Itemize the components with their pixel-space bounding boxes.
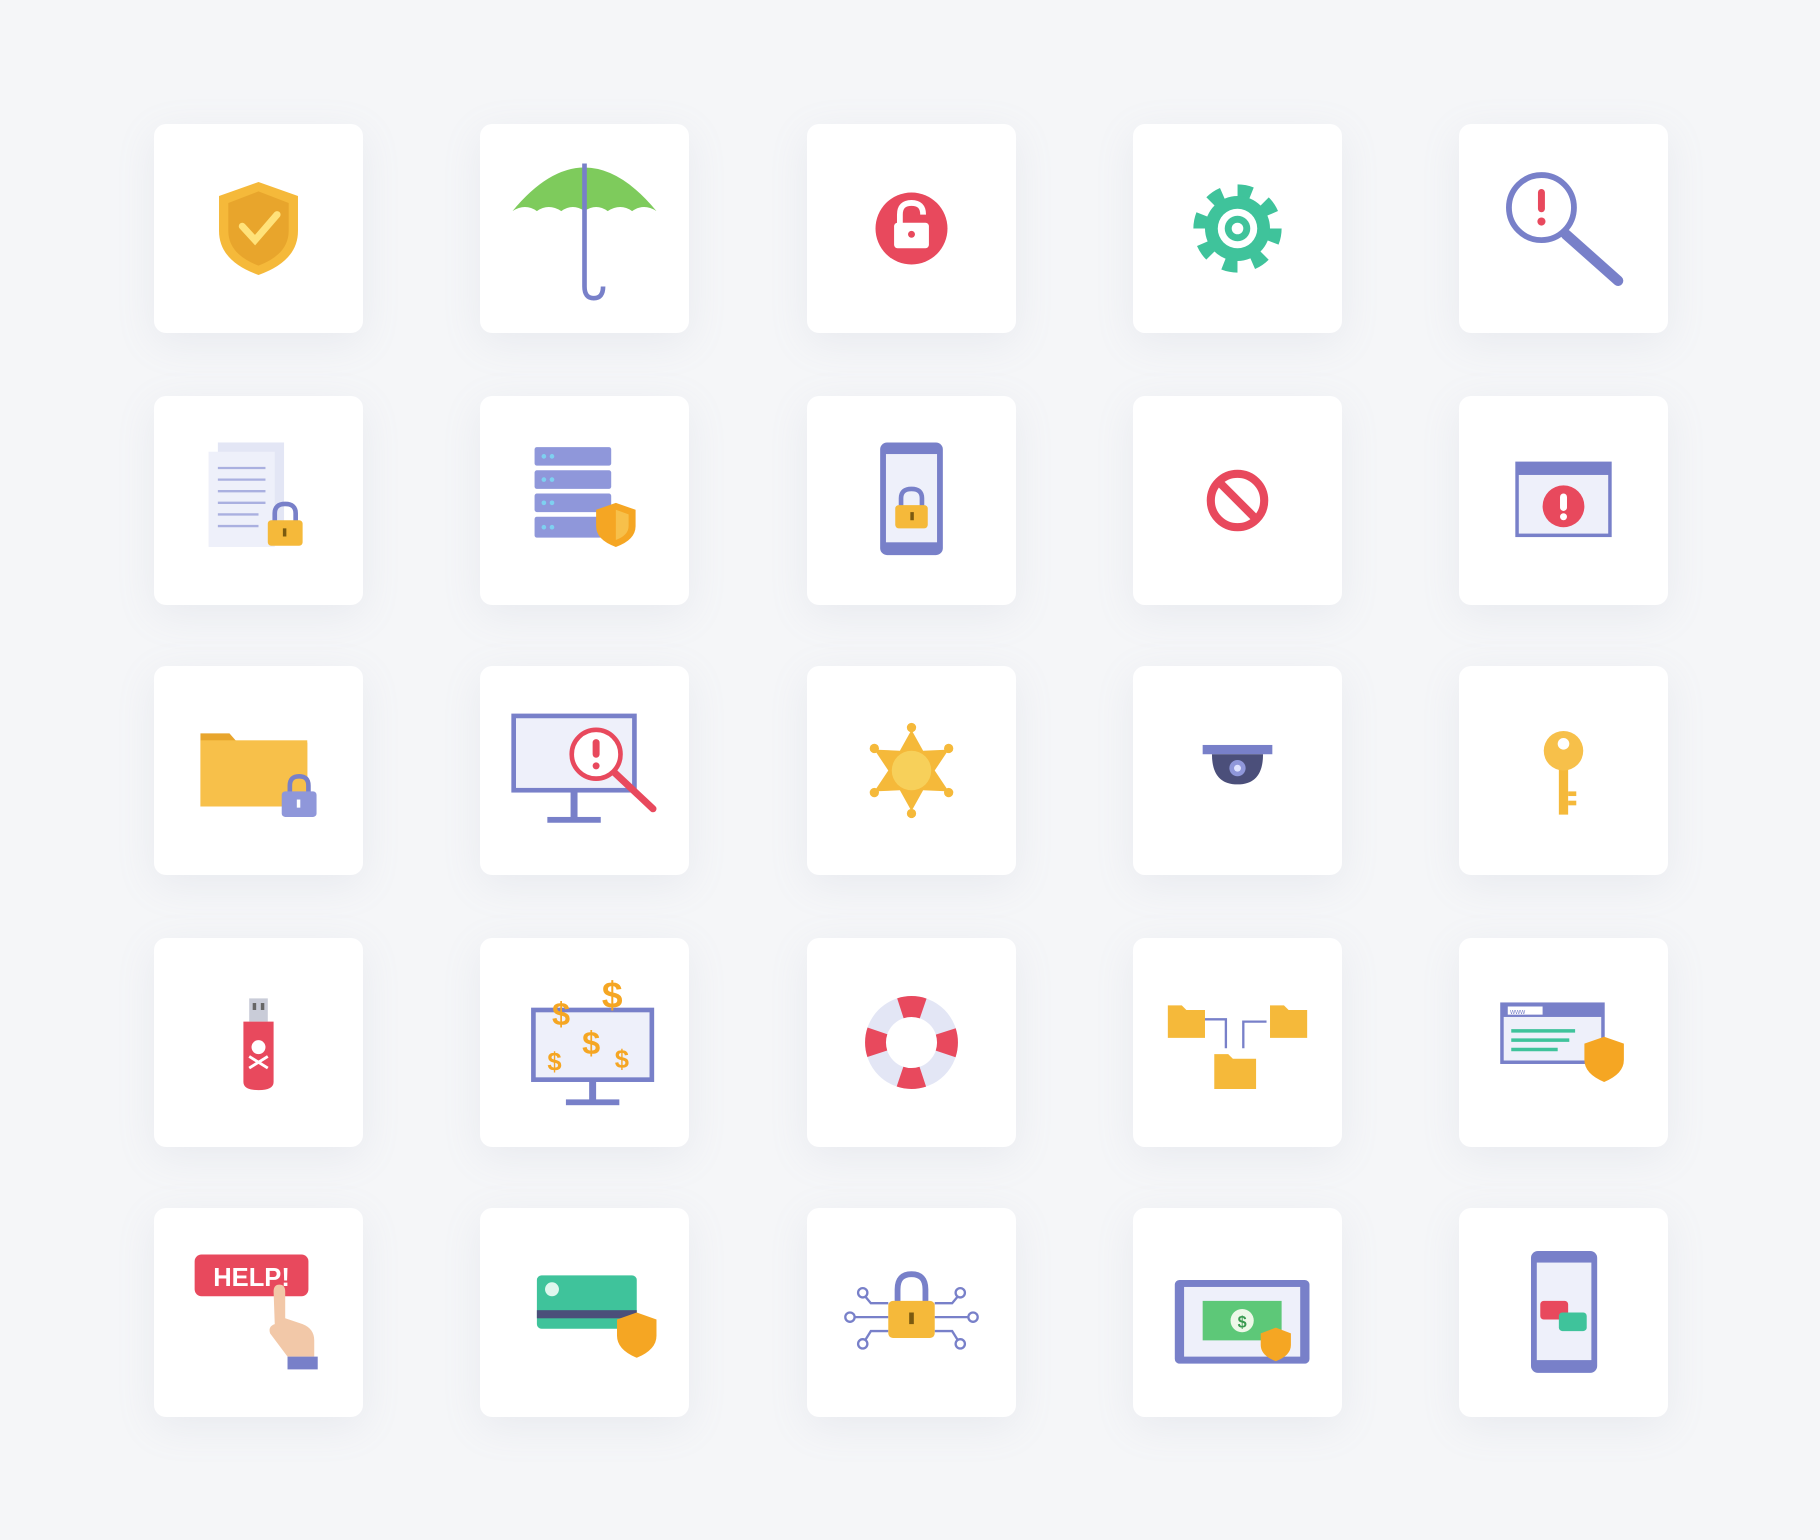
card: credit card shield (480, 1208, 689, 1417)
icon: monitor magnifier (514, 716, 653, 823)
card: www shield (1459, 938, 1668, 1147)
icon: browser window (1517, 463, 1610, 535)
icon: tablet with banknote (1175, 1280, 1309, 1364)
icon: folders tree (1168, 1005, 1307, 1089)
icon: money monitor: $ (547, 1048, 562, 1076)
icon: usb drive (243, 998, 274, 1090)
card: camera (1133, 666, 1342, 875)
icon: money monitor: $ (552, 996, 570, 1032)
icon: folder (200, 733, 317, 817)
icon: website shield: www (1509, 1009, 1526, 1016)
card: monitor dollars (480, 938, 689, 1147)
icon: tablet with banknote: $ (1238, 1314, 1247, 1332)
icon: dome camera (1203, 745, 1272, 784)
card: phone chat (1459, 1208, 1668, 1417)
card: tablet money (1133, 1208, 1342, 1417)
card: lifebuoy (807, 938, 1016, 1147)
icon: help button hand: HELP! (213, 1264, 290, 1292)
card: gear (1133, 124, 1342, 333)
card: folder lock (154, 666, 363, 875)
icon: gear (1200, 191, 1275, 266)
icon: money monitor: $ (602, 974, 623, 1016)
icon: server (535, 447, 636, 547)
icon: money monitor: $ (582, 1025, 600, 1061)
icon: money monitor: $ (615, 1046, 629, 1074)
icon: magnifier (1509, 175, 1618, 281)
card: monitor search (480, 666, 689, 875)
icon: card (537, 1275, 656, 1358)
card: key (1459, 666, 1668, 875)
card: magnifier alert (1459, 124, 1668, 333)
card: server shield (480, 396, 689, 605)
icon: lifebuoy (876, 1007, 947, 1078)
icon: phone chat (1531, 1251, 1597, 1373)
icon: star badge (870, 723, 953, 818)
icon: red lock (876, 193, 947, 264)
icon: umbrella (513, 163, 656, 298)
card: phone lock (807, 396, 1016, 605)
card: shield check (154, 124, 363, 333)
card: lock network (807, 1208, 1016, 1417)
card: browser alert (1459, 396, 1668, 605)
card: umbrella (480, 124, 689, 333)
card: locked document (154, 396, 363, 605)
card: help button (154, 1208, 363, 1417)
card: lock circle (807, 124, 1016, 333)
card: folder network (1133, 938, 1342, 1147)
card: sheriff star (807, 666, 1016, 875)
icon: help button hand (195, 1254, 318, 1369)
icon: document lock (209, 442, 303, 547)
icon: money monitor (533, 974, 652, 1105)
card: no sign (1133, 396, 1342, 605)
icon: website shield (1502, 1004, 1624, 1082)
icon: key (1544, 731, 1583, 815)
icon: phone (880, 442, 943, 555)
icon: shield (219, 182, 298, 275)
icon: circuit lock (845, 1274, 978, 1348)
icon: prohibited (1211, 474, 1264, 527)
card: malicious usb (154, 938, 363, 1147)
